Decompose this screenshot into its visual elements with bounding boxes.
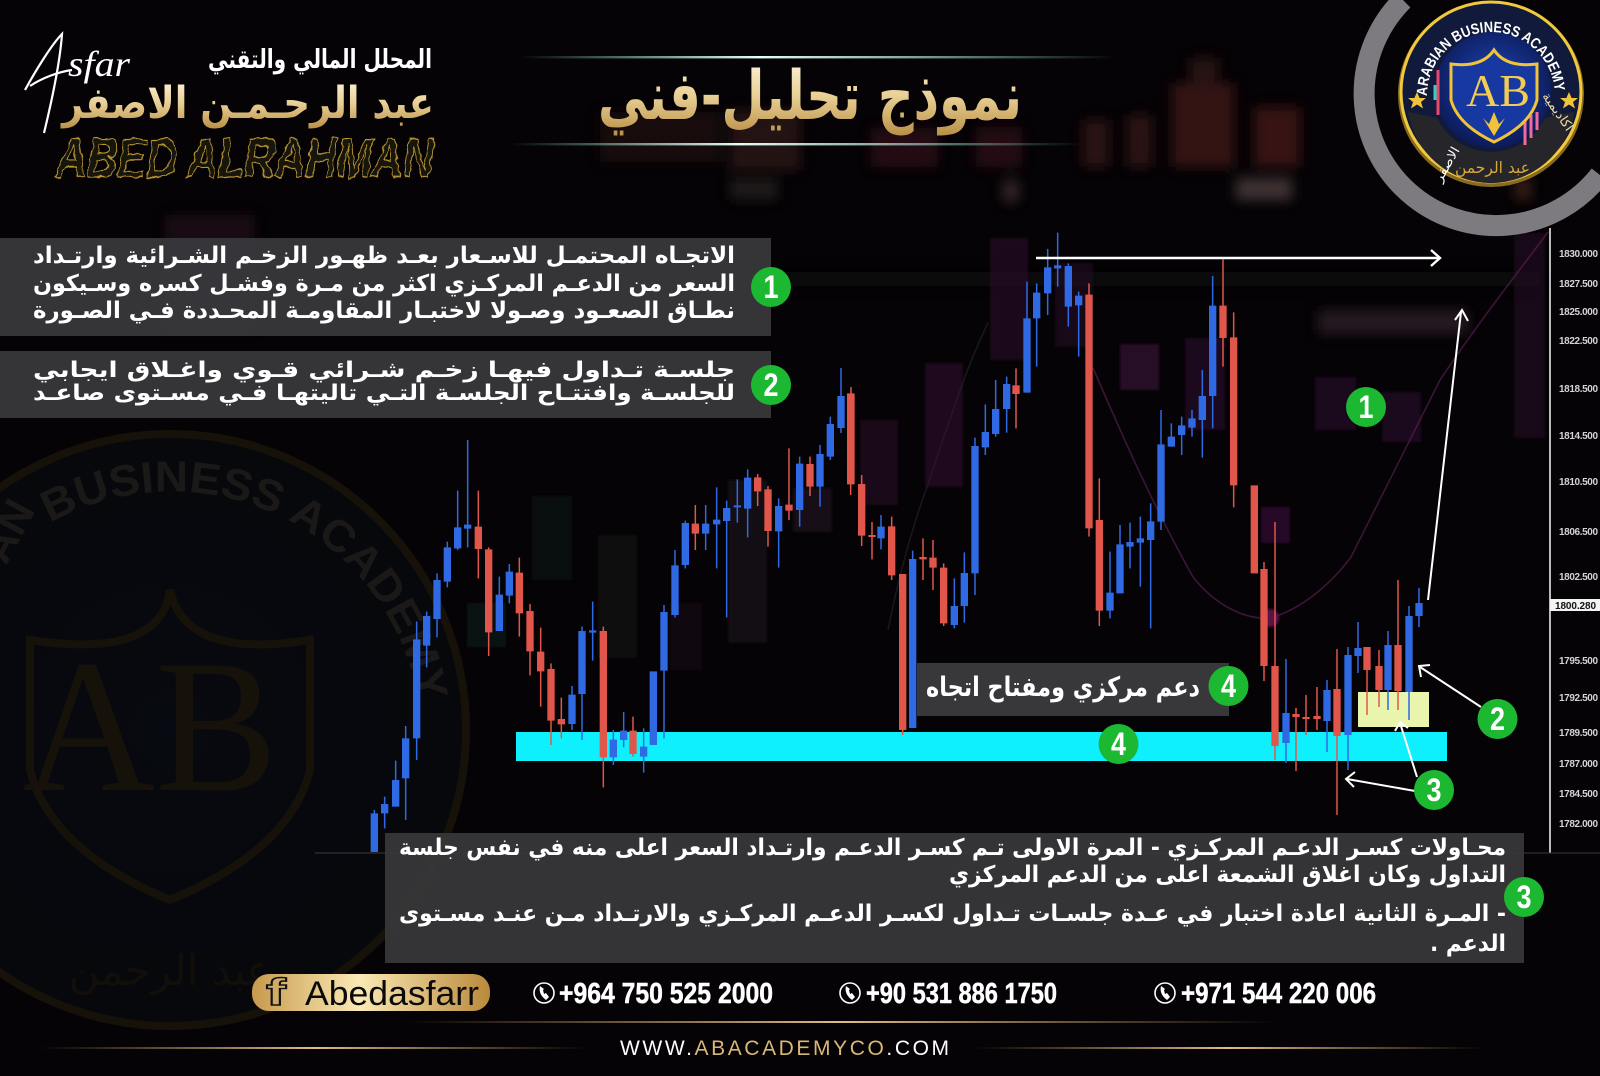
badge: panel 2: 2: [764, 367, 778, 403]
arrow: projected rise: [1428, 310, 1468, 600]
chart axis: 1810.500: [1559, 477, 1598, 488]
chart axis: 1827.500: [1559, 279, 1598, 290]
signature: Asfar: [25, 34, 131, 133]
chart axis: 1814.500: [1559, 431, 1598, 442]
academy logo: اكاديمية: [1538, 90, 1576, 134]
facebook pill: f: [266, 972, 287, 1014]
arrow: second test: [1395, 722, 1417, 777]
title: نموذج تحليل-فني: [598, 57, 1022, 136]
faint background candles: [467, 233, 1545, 670]
academy logo: عبد الرحمن: [1455, 158, 1530, 178]
badge: panel 2: [751, 365, 791, 405]
badge: panel 3: 3: [1516, 879, 1532, 915]
arrow: first break: [1346, 772, 1415, 791]
badge: zone 4: 4: [1111, 726, 1126, 762]
facebook pill: Abedasfarr: [305, 975, 479, 1013]
title rule bottom: [510, 143, 1083, 145]
faint academy watermark: عبد الرحمن: [68, 946, 272, 995]
chart axis: 1818.500: [1559, 384, 1598, 395]
website: WWW.ABACADEMYCO.COM: [620, 1037, 949, 1060]
faint trend curves: [888, 232, 1548, 630]
footer rule left: [40, 1047, 588, 1049]
panel: note 2: للجلسـة وافتتـاح الجلسـة التـي تاليتهـا فـي مسـتوى صاعـد: [33, 381, 735, 406]
phone 2: +90 531 886 1750: [866, 978, 1057, 1010]
faint academy watermark: BUSINESS ACADEMY: [40, 462, 448, 695]
badge: panel 1: [751, 267, 791, 307]
chart axis: 1806.500: [1559, 527, 1598, 538]
academy logo: الاصفر: [1431, 144, 1463, 186]
panel: support label: [917, 663, 1229, 716]
badge: chart 3: 3: [1426, 772, 1442, 808]
academy logo: ARABIAN BUSINESS ACADEMY: [1416, 22, 1566, 96]
panel: note 2: [0, 351, 771, 418]
blurred background chart: [0, 58, 1540, 334]
badge: zone 4: [1098, 724, 1138, 764]
chart axis: 1789.500: [1559, 728, 1598, 739]
chart axis: 1787.000: [1559, 759, 1598, 770]
chart axis: 1782.000: [1559, 819, 1598, 830]
analyst name arabic: عبد الرحـمـن الاصفر: [60, 78, 434, 129]
signature: Asfar: sfar: [68, 44, 131, 84]
panel: note 1: [0, 238, 771, 336]
faint academy watermark: [0, 430, 470, 1030]
panel: note 3: الدعم .: [1430, 931, 1506, 957]
badge: chart 2: [1478, 699, 1518, 739]
chart axis: 1800.280: [1555, 601, 1596, 612]
panel: note 3: [385, 833, 1524, 963]
title rule top: [520, 56, 1116, 58]
footer rule: [406, 1021, 1276, 1023]
academy logo: [1398, 0, 1584, 187]
chart axis: 1792.500: [1559, 693, 1598, 704]
chart axis: 1784.500: [1559, 789, 1598, 800]
footer rule right: [974, 1047, 1484, 1049]
analyst role: المحلل المالي والتقني: [208, 45, 432, 75]
highlight box: [1358, 692, 1429, 727]
faint academy watermark: AB: [22, 622, 278, 832]
badge: chart 1: [1346, 387, 1386, 427]
chart axis: [315, 228, 1600, 853]
panel: note 1: السعر من الدعـم المركـزي اكثر من مـرة وفشـل كسره وسـيكون: [33, 271, 735, 297]
panel: note 3: التداول وكان اغلاق الشمعة اعلى من الدعم المركزي: [949, 862, 1506, 888]
chart axis: 1825.000: [1559, 307, 1598, 318]
badge: support label 4: 4: [1221, 668, 1236, 704]
badge: chart 2: 2: [1490, 701, 1505, 737]
support zone: [516, 732, 1447, 761]
panel: note 2: جلسـة تـداول فيهـا زخـم شـرائي قـوي واغـلاق ايجابي: [33, 358, 735, 383]
panel: note 1: الاتجـاه المحتمـل للاسـعار بعـد ظهـور الزخـم الشـرائية وارتـداد: [33, 243, 735, 269]
academy logo: AB: [1466, 65, 1530, 116]
chart axis: 1822.500: [1559, 336, 1598, 347]
chart axis: 1830.000: [1559, 249, 1598, 260]
facebook pill: [252, 972, 490, 1014]
chart axis: 1802.500: [1559, 572, 1598, 583]
badge: chart 3: [1414, 770, 1454, 810]
panel: support label: دعم مركزي ومفتاح اتجاه: [926, 672, 1200, 703]
badge: panel 1: 1: [764, 269, 778, 305]
panel: note 1: نطـاق الصعـود وصـولا لاختبـار المقاومـة المحـددة فـي الصـورة: [33, 298, 735, 324]
candlestick chart: [374, 233, 1419, 852]
panel: note 3: محـاولات كسـر الدعـم المركـزي - المرة الاولى تـم كسـر الدعـم وارتـداد السعر اعلى منه في نفس جلسة: [399, 835, 1506, 861]
badge: support label 4: [1208, 666, 1248, 706]
panel: note 3: - المـرة الثانية اعادة اختبار في عـدة جلسـات تـداول لكسـر الدعـم المركـزي والارتـداد مـن عنـد مسـتوى: [399, 901, 1506, 927]
analyst name latin: ABED ALRAHMAN: [54, 126, 435, 189]
badge: panel 3: [1504, 877, 1544, 917]
chart axis: 1795.500: [1559, 656, 1598, 667]
phone 3: +971 544 220 006: [1181, 978, 1376, 1010]
phone 1: +964 750 525 2000: [559, 978, 773, 1010]
arrow: to session 2: [1419, 665, 1481, 707]
logo ring: [1364, 0, 1600, 226]
badge: chart 1: 1: [1358, 389, 1374, 425]
arrow: resistance level: [1036, 250, 1440, 266]
